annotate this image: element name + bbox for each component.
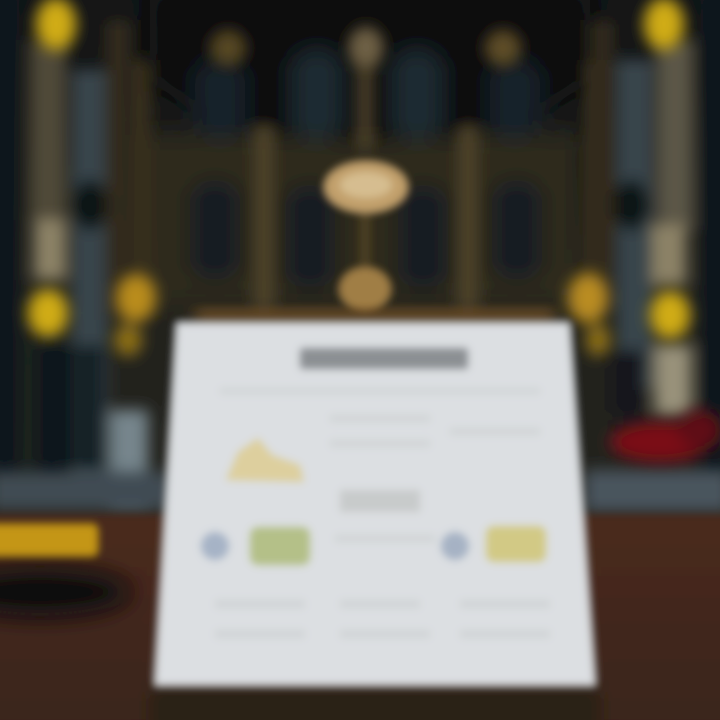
blue icon right	[441, 532, 469, 560]
yellow bench	[0, 524, 98, 556]
stone ledge left and right	[0, 470, 720, 512]
board top glow	[195, 310, 555, 322]
green chart blob	[250, 527, 310, 565]
upper hall lamps	[210, 27, 521, 67]
white information board	[154, 322, 596, 686]
board title	[300, 348, 468, 369]
blue icon left	[201, 532, 229, 560]
dark shadow below yellow bench	[0, 568, 130, 616]
yellow-green chart blob	[486, 526, 546, 562]
faint text lines	[215, 388, 550, 638]
gold vertical pilasters	[130, 40, 607, 310]
right columns	[590, 0, 720, 480]
left columns	[0, 0, 148, 505]
red cushion	[610, 410, 720, 462]
wooden floor	[0, 514, 720, 720]
central golden chandelier	[324, 161, 408, 311]
upper arcade of dark arches	[140, 0, 590, 305]
yellow chart blob	[226, 438, 304, 482]
board sheet	[154, 322, 596, 686]
board base shadow	[150, 686, 600, 720]
yellow lights	[28, 0, 690, 356]
